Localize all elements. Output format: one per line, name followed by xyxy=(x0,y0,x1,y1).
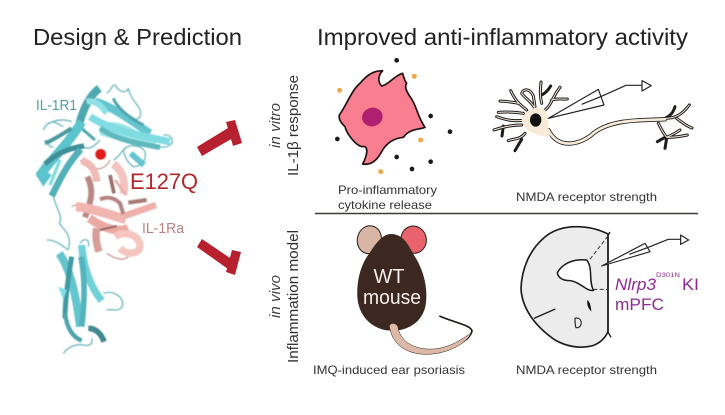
caption: Pro-inflammatory cytokine release: Pro-inflammatory xyxy=(338,183,437,197)
icon: WT mouse xyxy=(355,223,472,354)
inhibition arrow: upper xyxy=(197,120,242,156)
label: Nlrp3 D301N KI mPFC: KI xyxy=(682,275,699,294)
label: Nlrp3 D301N KI mPFC xyxy=(615,272,699,314)
row label: in vitro, IL-1β response: IL-1β response xyxy=(285,75,302,176)
label: Nlrp3 D301N KI mPFC: D301N xyxy=(656,272,680,279)
heading: Design & Prediction: Design & Prediction xyxy=(33,24,242,50)
cytokine dots xyxy=(335,58,452,171)
E127Q mutation site dot xyxy=(95,149,106,160)
label: Nlrp3 D301N KI mPFC: Nlrp3 xyxy=(615,275,657,294)
body xyxy=(357,234,426,331)
label: Nlrp3 D301N KI mPFC: mPFC xyxy=(615,295,664,314)
divider between rows xyxy=(315,212,698,214)
label: IL-1R1: IL-1R1 xyxy=(36,98,77,114)
mouse label: WT mouse xyxy=(363,265,421,309)
soma nucleus xyxy=(530,113,541,127)
soma xyxy=(522,107,551,137)
dendrite fill xyxy=(494,82,692,144)
row label: in vitro, IL-1β response xyxy=(267,75,302,176)
right ear xyxy=(398,223,429,256)
tail base xyxy=(389,323,471,354)
protein structure: IL-1R1 and IL-1Ra complex xyxy=(36,85,172,353)
IL-1R1 ribbon (cyan) xyxy=(36,85,172,353)
electrode xyxy=(602,235,689,266)
caption: IMQ-induced ear psoriasis: IMQ-induced ear psoriasis xyxy=(313,363,465,377)
row label: in vitro, IL-1β response: in vitro xyxy=(267,103,284,148)
icon: brain section with electrode xyxy=(521,227,689,347)
caption: Pro-inflammatory cytokine release xyxy=(338,183,437,212)
label: IL-1Ra: IL-1Ra xyxy=(142,221,185,237)
electrode xyxy=(548,81,651,118)
left domain strands xyxy=(39,122,82,177)
section outline xyxy=(521,227,608,347)
label: E127Q: E127Q xyxy=(130,169,198,194)
icon: neuron with recording electrode xyxy=(494,81,692,151)
IL-1Ra ribbon (pink) xyxy=(72,160,156,259)
heading: Improved anti-inflammatory activity: Improved anti-inflammatory activity xyxy=(317,24,689,50)
icon: inflammatory cell with cytokines xyxy=(335,58,452,174)
mouse label: WT mouse: mouse xyxy=(363,286,421,309)
caption: NMDA receptor strength (bottom): NMDA receptor strength xyxy=(516,363,657,377)
row label: in vivo, Inflammation model: Inflammation model xyxy=(285,230,302,363)
mouse label: WT mouse: WT xyxy=(374,265,405,288)
caption: Pro-inflammatory cytokine release: cytokine release xyxy=(338,198,432,212)
row label: in vivo, Inflammation model xyxy=(267,230,302,363)
inhibition arrow: lower xyxy=(197,239,241,275)
row label: in vivo, Inflammation model: in vivo xyxy=(267,275,284,318)
caption: NMDA receptor strength (top): NMDA receptor strength xyxy=(516,190,657,204)
left ear xyxy=(355,223,384,256)
cell body xyxy=(339,71,425,164)
top-right domain strands xyxy=(100,122,157,145)
tail xyxy=(427,316,472,353)
lower domain strands xyxy=(59,253,80,327)
midline ticks xyxy=(608,232,611,337)
ventricle xyxy=(557,260,593,290)
dendrite outlines xyxy=(494,82,692,151)
nucleus xyxy=(360,105,385,129)
